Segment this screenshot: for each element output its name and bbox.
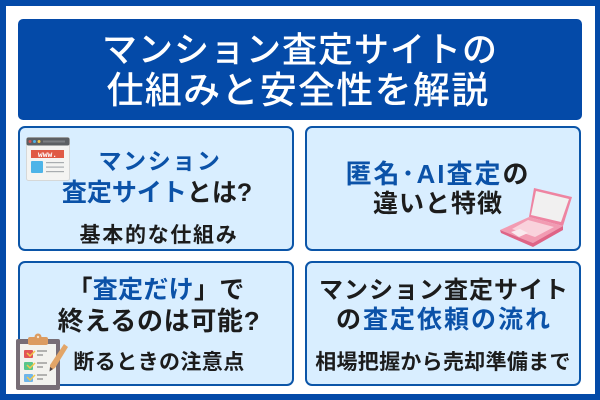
- card 2 heading line 2: 違いと特徴: [373, 190, 503, 218]
- card 1 heading: マンション: [98, 148, 222, 174]
- panel: what is a condo appraisal site: [18, 126, 294, 251]
- card 3 heading: 「査定だけ」で: [67, 276, 245, 304]
- icon: pink laptop: [500, 188, 572, 247]
- card 4 subheading: 相場把握から売却準備まで: [315, 351, 571, 374]
- icon: browser window: [26, 137, 70, 181]
- card 1 subheading: 基本的な仕組み: [80, 224, 238, 247]
- icon: clipboard checklist: [16, 334, 68, 390]
- title banner: 仕組みと安全性を解説: [106, 70, 490, 111]
- card 4 heading: マンション査定サイト: [319, 277, 569, 304]
- card 2 heading: 匿名･AI査定の: [345, 159, 531, 189]
- panel: anonymous and AI appraisal: [305, 126, 581, 251]
- card 3 heading line 2: 終えるのは可能?: [58, 306, 260, 336]
- title banner: [18, 19, 582, 120]
- card 3 subheading: 断るときの注意点: [73, 351, 245, 374]
- icon: browser window: www.: [38, 151, 57, 160]
- panel: appraisal request flow: [305, 261, 581, 386]
- title banner: マンション査定サイトの: [102, 31, 498, 70]
- panel: appraisal only: [18, 261, 294, 386]
- card 4 heading line 2: の査定依頼の流れ: [336, 306, 552, 334]
- card 1 heading line 2: 査定サイトとは?: [62, 179, 252, 207]
